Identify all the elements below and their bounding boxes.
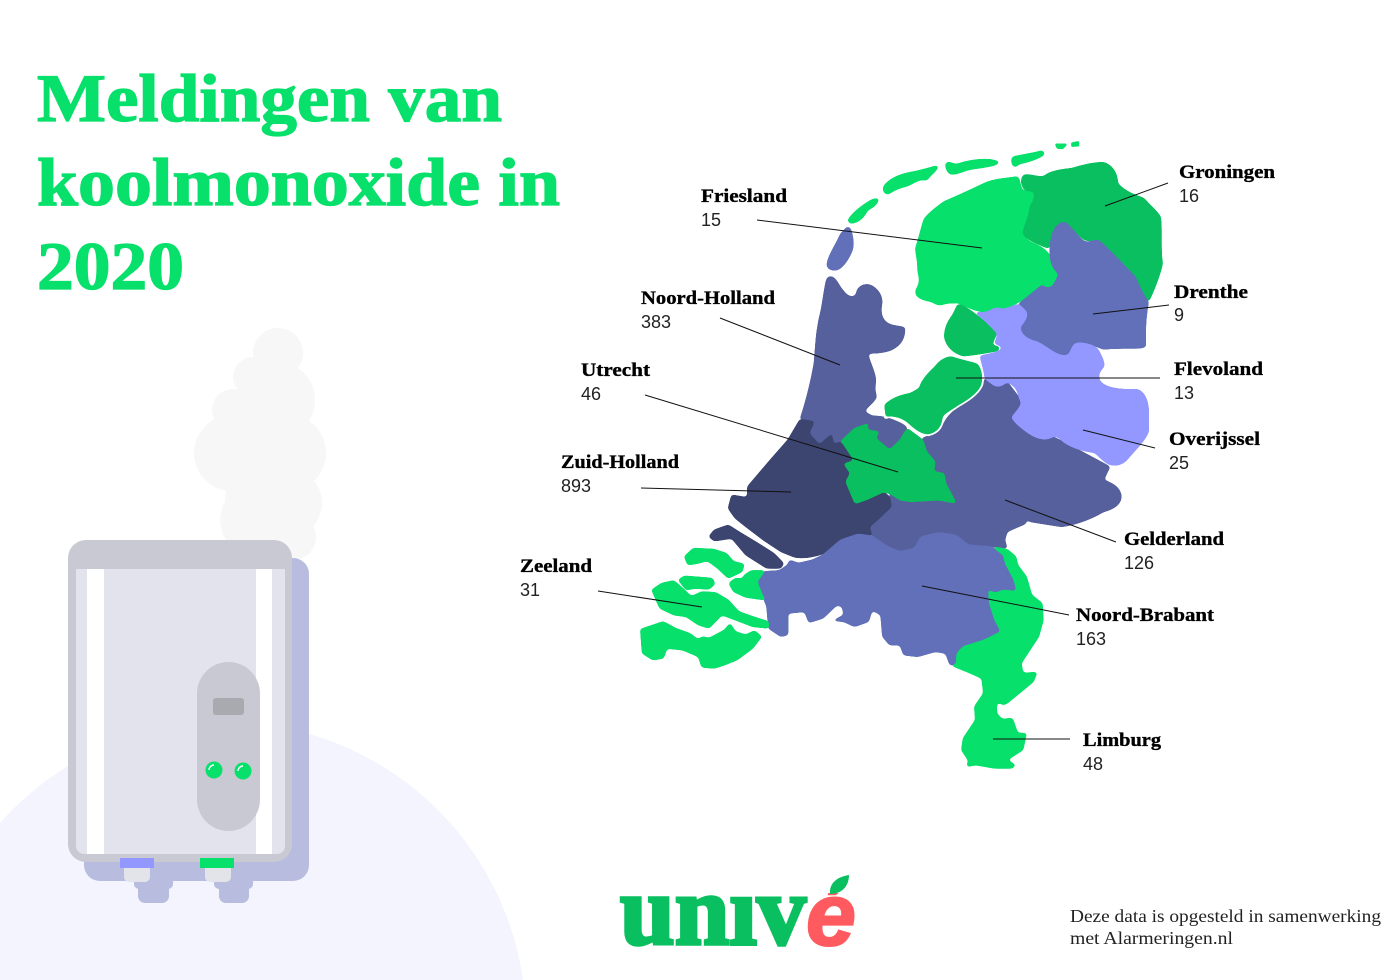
logo leaf: [830, 875, 849, 894]
label: Groningen: Groningen: [1179, 162, 1275, 183]
label: Utrecht: [581, 360, 651, 404]
label: Noord-Brabant: 163: [1076, 629, 1106, 649]
label: Zuid-Holland: 893: [561, 476, 591, 496]
label: Utrecht: Utrecht: [581, 360, 651, 381]
label: Friesland: Friesland: [701, 186, 787, 207]
background circle: [0, 722, 523, 980]
label: Gelderland: Gelderland: [1124, 529, 1224, 550]
label: Drenthe: Drenthe: [1174, 282, 1248, 303]
label: Flevoland: Flevoland: [1174, 359, 1263, 380]
Zeeland: [641, 548, 769, 668]
label: Friesland: [701, 186, 787, 230]
buttons: [206, 762, 252, 780]
label: Zeeland: 31: [520, 580, 540, 600]
label: Friesland: 15: [701, 210, 721, 230]
boiler front: [76, 569, 285, 854]
leader lines: [598, 183, 1169, 739]
label: Limburg: [1083, 730, 1162, 774]
label: Gelderland: 126: [1124, 553, 1154, 573]
label: Noord-Holland: [641, 288, 775, 332]
icon: boiler: [68, 540, 292, 882]
logo: Univé: é: [806, 865, 856, 964]
boiler highlights: [87, 569, 272, 854]
Flevoland north: [945, 304, 999, 356]
label: Overijssel: [1169, 429, 1260, 473]
icon: smoke: [194, 328, 326, 580]
title: 2020: [37, 228, 184, 304]
label: Noord-Brabant: [1076, 605, 1215, 649]
logo: Univé: univ: [620, 855, 806, 966]
map of the Netherlands: [641, 143, 1163, 768]
label: Noord-Holland: 383: [641, 312, 671, 332]
Flevoland south: [885, 357, 982, 434]
boiler casing: [68, 540, 292, 862]
title: Meldingen van: [37, 60, 502, 136]
label: Limburg: Limburg: [1083, 730, 1162, 751]
icon: boiler shadow: [84, 558, 309, 903]
label: Overijssel: 25: [1169, 453, 1189, 473]
label: Noord-Holland: Noord-Holland: [641, 288, 775, 309]
right connector: [200, 858, 234, 882]
control panel: [197, 662, 260, 831]
title: koolmonoxide in: [37, 144, 560, 220]
label: Zeeland: [520, 556, 592, 600]
display: [213, 698, 244, 715]
label: Overijssel: Overijssel: [1169, 429, 1260, 450]
label: Zuid-Holland: [561, 452, 679, 496]
data source note: Deze data is opgesteld in samenwerking: [1070, 906, 1381, 926]
title: [37, 60, 560, 304]
label: Flevoland: [1174, 359, 1263, 403]
Limburg: [950, 547, 1043, 768]
Noord-Holland: [800, 276, 907, 450]
label: Zeeland: Zeeland: [520, 556, 592, 577]
left connector: [120, 858, 154, 882]
label: Drenthe: 9: [1174, 305, 1184, 325]
label: Flevoland: 13: [1174, 383, 1194, 403]
Texel: [827, 227, 853, 270]
label: Limburg: 48: [1083, 754, 1103, 774]
data source note: [1070, 906, 1381, 948]
label: Groningen: [1179, 162, 1275, 206]
Wadden islands: [849, 143, 1078, 222]
Noord-Brabant: [757, 533, 1017, 665]
label: Groningen: 16: [1179, 186, 1199, 206]
data source note: met Alarmeringen.nl: [1070, 928, 1233, 948]
Drenthe: [1018, 222, 1148, 356]
Goeree-Overflakkee: [709, 525, 784, 568]
Zuid-Holland: [728, 419, 891, 558]
Groningen: [1021, 162, 1163, 302]
label: Gelderland: [1124, 529, 1224, 573]
Utrecht: [840, 423, 956, 505]
Friesland: [916, 177, 1059, 312]
Flevoland south outline: [885, 357, 982, 434]
logo mask over i dot and accent: [725, 862, 860, 896]
label: Drenthe: [1174, 282, 1248, 325]
Gelderland: [869, 378, 1121, 552]
label: Utrecht: 46: [581, 384, 601, 404]
label: Zuid-Holland: Zuid-Holland: [561, 452, 679, 473]
label: Noord-Brabant: Noord-Brabant: [1076, 605, 1215, 626]
Overijssel: [975, 304, 1149, 465]
